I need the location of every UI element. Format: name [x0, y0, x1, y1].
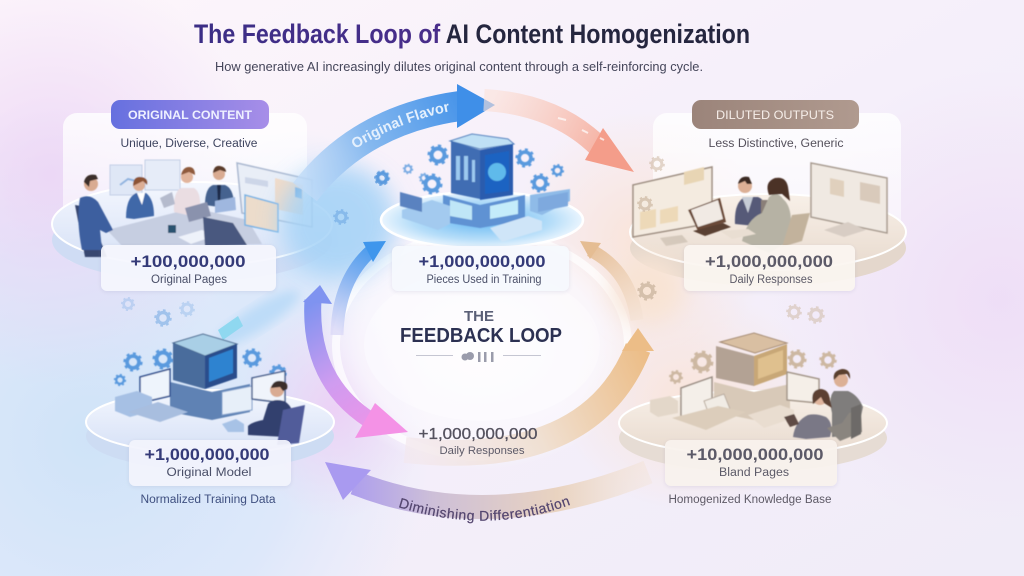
stat: original model — [129, 440, 291, 486]
arrow: up to training — [337, 241, 386, 335]
stat: daily responses center: +1,000,000,000 — [418, 426, 538, 443]
arrow: orange rising — [405, 328, 654, 453]
arrow: blue to pink double — [303, 285, 408, 438]
server and workstation — [650, 333, 863, 441]
panel: original model scene — [86, 334, 334, 470]
panel: original content — [52, 100, 332, 282]
center label: the feedback loop: THE — [464, 309, 494, 325]
pill: original content — [111, 100, 269, 129]
stat: daily responses center: Daily Responses — [440, 445, 525, 457]
panel: diluted outputs — [630, 100, 906, 286]
stat: pieces used in training — [392, 246, 569, 291]
pill: original content: ORIGINAL CONTENT — [128, 110, 252, 122]
stat: pieces used in training: Pieces Used in Training — [426, 274, 542, 286]
stat: original pages: +100,000,000 — [130, 252, 246, 271]
stat: daily responses top right: +1,000,000,000 — [705, 252, 833, 271]
subtitle: How generative AI increasingly dilutes original content through a self-reinforcing cycle. — [215, 59, 703, 74]
peach particle cloud with gears — [612, 157, 824, 324]
blue particle cloud with gears — [122, 166, 396, 354]
arrow: peach up to training — [580, 241, 637, 320]
office scene — [75, 160, 312, 257]
caption: unique diverse creative: Unique, Diverse, Creative — [120, 138, 258, 150]
arrow: to diluted outputs — [484, 100, 634, 172]
stat: original model: +1,000,000,000 — [144, 445, 270, 464]
arrow: original flavor — [293, 84, 495, 201]
label: original flavor: Original Flavor — [352, 104, 449, 148]
stat: original pages — [101, 245, 276, 291]
platform — [630, 194, 906, 286]
gears — [670, 351, 836, 383]
panel: training model hub — [376, 134, 583, 248]
panel: bland pages scene — [619, 333, 887, 472]
platform — [381, 192, 583, 248]
gears — [376, 146, 563, 193]
stat: original pages: Original Pages — [151, 274, 227, 286]
center label: the feedback loop — [400, 309, 562, 362]
server and workstation — [115, 334, 305, 445]
office scene — [633, 163, 887, 253]
caption: normalized training data: Normalized Training Data — [140, 494, 276, 506]
gears — [115, 350, 286, 385]
pill: diluted outputs: DILUTED OUTPUTS — [716, 110, 834, 122]
stat: bland pages — [665, 440, 837, 486]
platform — [86, 390, 334, 470]
platform — [619, 391, 887, 472]
stat: daily responses top right: Daily Responses — [730, 274, 813, 286]
caption: homogenized knowledge base: Homogenized Knowledge Base — [668, 494, 832, 506]
stat: bland pages: Bland Pages — [719, 467, 789, 479]
icon: divider mark — [416, 352, 541, 362]
stat: original model: Original Model — [166, 467, 252, 479]
center label: the feedback loop: FEEDBACK LOOP — [400, 324, 562, 347]
stat: pieces used in training: +1,000,000,000 — [418, 252, 546, 271]
platform — [52, 182, 332, 282]
stat: daily responses top right — [684, 245, 855, 291]
stat: daily responses center — [418, 426, 538, 457]
caption: less distinctive generic: Less Distinctive, Generic — [708, 138, 844, 150]
stat: bland pages: +10,000,000,000 — [686, 445, 824, 464]
center ring — [336, 233, 628, 457]
arrow: diminishing differentiation — [325, 461, 652, 524]
server cube — [400, 134, 570, 242]
label: diminishing differentiation: Diminishing Differentiation — [399, 498, 570, 524]
title: The Feedback Loop of AI Content Homogenization — [194, 19, 750, 49]
pill: diluted outputs — [692, 100, 859, 129]
